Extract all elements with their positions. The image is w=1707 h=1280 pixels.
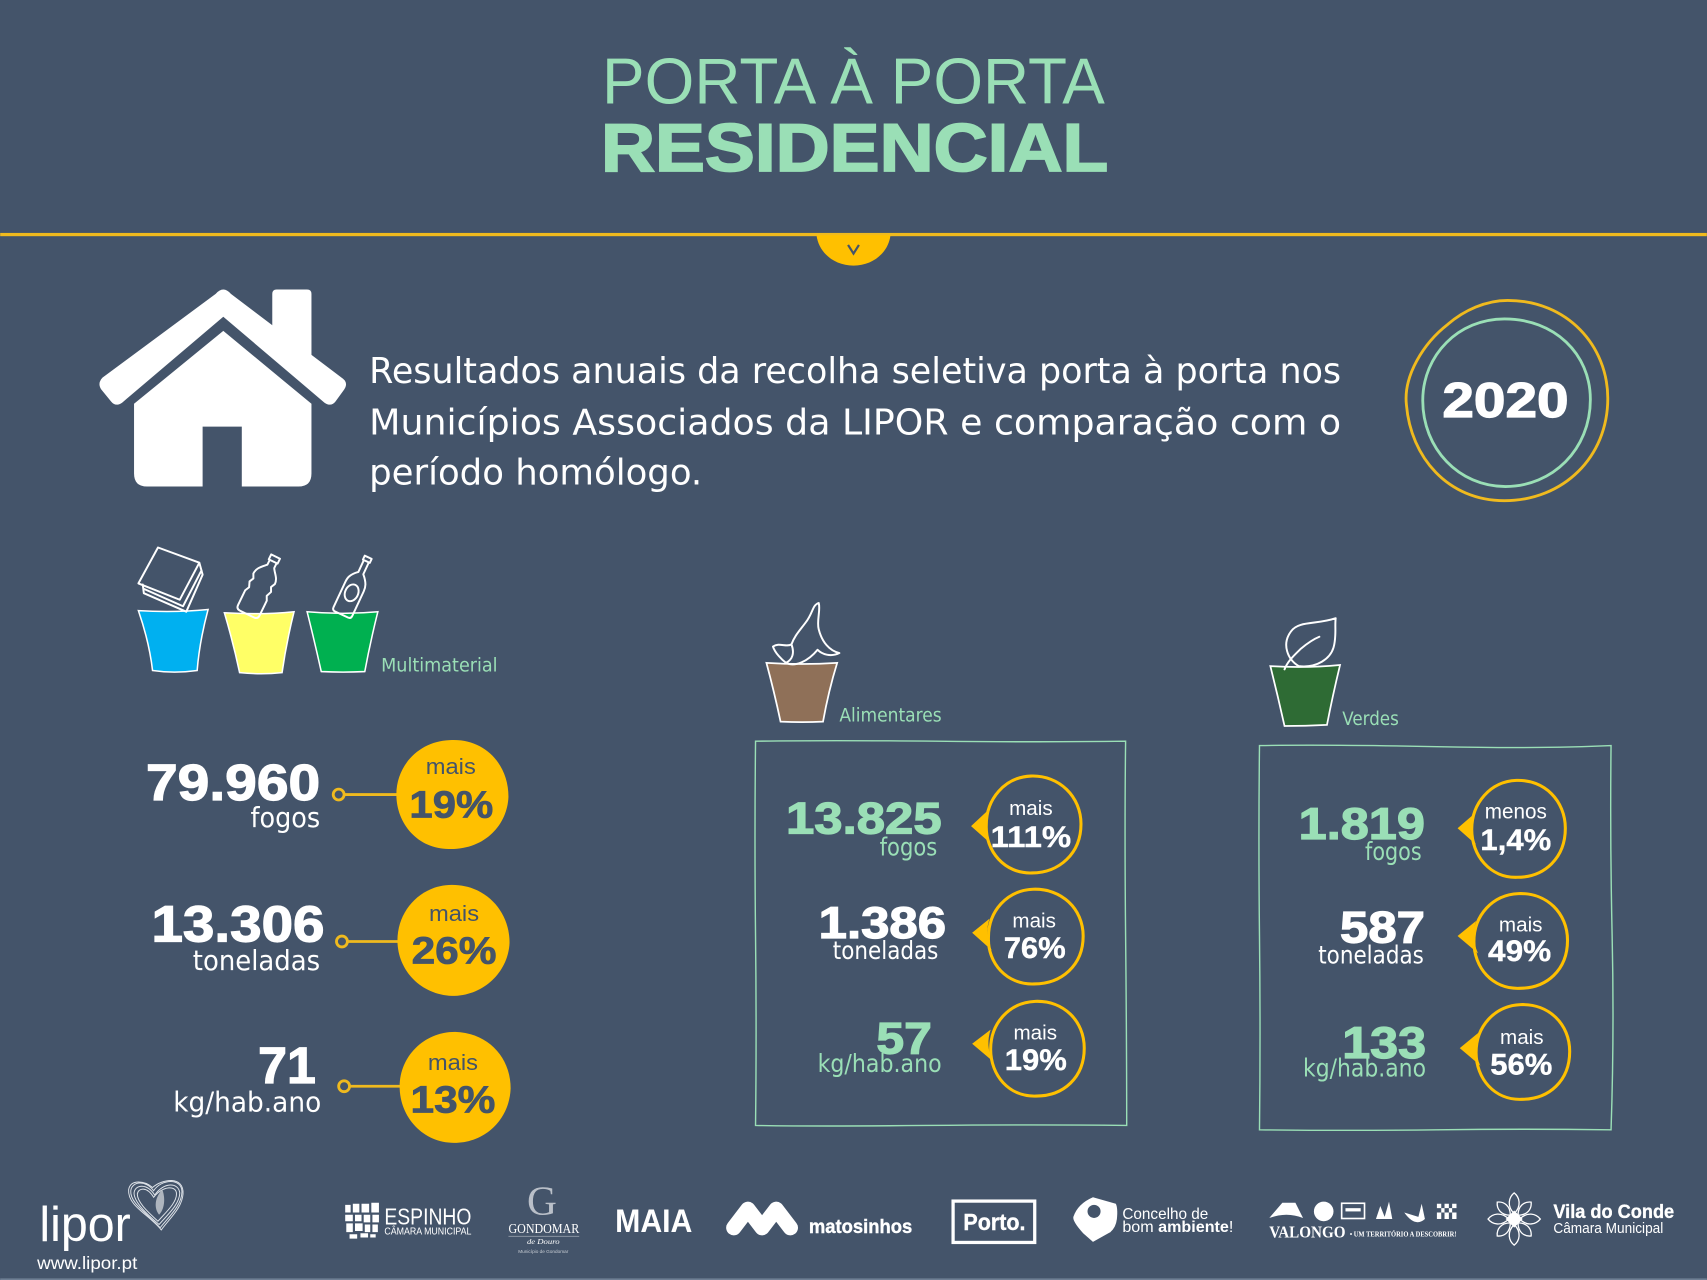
stat: 71 kg/hab.ano: kg/hab.ano (173, 1087, 321, 1118)
bubble: mais 56%: mais (1500, 1026, 1544, 1049)
logo: Espinho: ESPINHO (384, 1203, 471, 1229)
bubble: mais 111%: mais (1009, 797, 1053, 820)
bubble: mais 19%: mais (1014, 1021, 1057, 1044)
bubble: mais 49%: 49% (1488, 935, 1551, 968)
stat: 57 kg/hab.ano: kg/hab.ano (818, 1049, 942, 1078)
stat: 1.819 fogos: fogos (1365, 837, 1422, 866)
logo: Matosinhos (734, 1209, 912, 1238)
bubble: mais 76%: 76% (1004, 932, 1066, 965)
label: Verdes: Verdes (1342, 709, 1399, 730)
stat: 1.819 fogos: 1.819 (1299, 800, 1425, 849)
logo: lipor: lipor (39, 1198, 131, 1252)
label: Alimentares: Alimentares (839, 706, 942, 727)
logo: Valongo: • UM TERRITÓRIO A DESCOBRIR! (1350, 1228, 1456, 1238)
stat: 133 kg/hab.ano: kg/hab.ano (1303, 1053, 1426, 1082)
stat: 57 kg/hab.ano: 57 (876, 1015, 932, 1064)
year badge 2020: 2020 (1442, 374, 1569, 428)
stat: 13.825 fogos: fogos (880, 833, 937, 862)
logo: Póvoa de Varzim: Concelho de (1122, 1206, 1209, 1223)
divider with tab (0, 233, 1707, 266)
stat: 587 toneladas (1318, 904, 1425, 969)
icon: brown bin with banana peel (766, 603, 839, 722)
stat: 57 kg/hab.ano (818, 1015, 942, 1078)
logo: Porto: Porto. (963, 1209, 1025, 1235)
stat: 1.819 fogos (1299, 800, 1425, 866)
title: RESIDENCIAL (601, 111, 1108, 186)
logo: Valongo (1269, 1202, 1456, 1242)
stat: 13.306 toneladas: 13.306 (151, 895, 325, 952)
title (601, 44, 1108, 186)
logo: lipor: www.lipor.pt (36, 1253, 137, 1273)
badge: mais 26%: mais (429, 901, 479, 926)
frame: alimentares (755, 741, 1127, 1126)
bubble: menos 1,4% (1458, 780, 1565, 877)
stat: 71 kg/hab.ano (173, 1037, 321, 1118)
intro text: período homólogo. (369, 452, 702, 493)
logo: Gondomar: GONDOMAR (508, 1221, 580, 1237)
logo: Espinho (345, 1203, 472, 1239)
icon: green bin with glass bottle (307, 553, 378, 672)
bubble: menos 1,4%: 1,4% (1480, 824, 1551, 857)
icon: yellow bin with plastic bottle (224, 551, 294, 674)
logo: Valongo: VALONGO (1269, 1223, 1345, 1242)
badge: mais 19%: mais (426, 754, 476, 779)
badge: mais 13%: 13% (411, 1079, 495, 1121)
title: PORTA À PORTA (602, 44, 1105, 117)
stat: 13.306 toneladas (151, 895, 325, 977)
bubble: mais 56%: 56% (1490, 1048, 1552, 1081)
logo: Gondomar: Município de Gondomar (518, 1249, 569, 1255)
stat: 133 kg/hab.ano: 133 (1342, 1019, 1426, 1068)
footer logos (36, 1178, 1674, 1273)
logo: Vila do Conde: Câmara Municipal (1553, 1221, 1663, 1237)
logo: Gondomar (508, 1178, 580, 1255)
icon: house (99, 290, 346, 487)
panel: multimaterial (138, 547, 511, 1143)
stat: 1.386 toneladas (819, 899, 946, 965)
stat: 71 kg/hab.ano: 71 (258, 1037, 316, 1094)
panel: alimentares (755, 603, 1127, 1126)
stat: 587 toneladas: 587 (1340, 904, 1425, 953)
logo: Póvoa de Varzim: bom ambiente! (1122, 1219, 1233, 1236)
bubble: mais 19% (972, 1001, 1084, 1096)
badge: mais 13% (339, 1032, 511, 1143)
logo: Póvoa de Varzim (1073, 1197, 1233, 1242)
stat: 79.960 fogos: fogos (251, 803, 320, 834)
badge: mais 19% (333, 740, 508, 849)
bubble: mais 49%: mais (1499, 914, 1542, 937)
panel: verdes (1259, 618, 1613, 1130)
logo: Espinho: CÂMARA MUNICIPAL (384, 1226, 472, 1237)
bubble: mais 76% (972, 889, 1083, 984)
stat: 13.306 toneladas: toneladas (193, 946, 320, 977)
icon: blue bin with paper (138, 547, 208, 672)
bubble: menos 1,4%: menos (1485, 801, 1547, 824)
logo: Porto (953, 1201, 1035, 1242)
stat: 13.825 fogos: 13.825 (786, 795, 942, 844)
intro text: Municípios Associados da LIPOR e comparação com o (369, 402, 1341, 443)
logo: Vila do Conde: Vila do Conde (1553, 1202, 1674, 1223)
label: Multimaterial: Multimaterial (381, 656, 498, 677)
intro text: Resultados anuais da recolha seletiva porta à porta nos (369, 351, 1341, 392)
bubble: mais 19%: 19% (1005, 1044, 1067, 1077)
year badge 2020 (1406, 300, 1608, 501)
stat: 587 toneladas: toneladas (1318, 940, 1424, 969)
badge: mais 26%: 26% (412, 930, 496, 972)
logo: Maia: MAIA (615, 1202, 692, 1239)
bubble: mais 49% (1458, 894, 1568, 988)
stat: 79.960 fogos: 79.960 (146, 754, 320, 811)
badge: mais 26% (336, 885, 510, 996)
bubble: mais 111% (971, 776, 1081, 873)
logo: Gondomar: de Douro (527, 1237, 560, 1246)
bubble: mais 56% (1460, 1005, 1570, 1099)
badge: mais 19%: 19% (409, 784, 493, 826)
stat: 13.825 fogos (786, 795, 942, 862)
logo: Matosinhos: matosinhos (809, 1216, 912, 1238)
intro text (369, 351, 1341, 493)
stat: 79.960 fogos (146, 754, 320, 834)
stat: 1.386 toneladas: 1.386 (819, 899, 946, 948)
logo: Vila do Conde (1488, 1193, 1674, 1245)
stat: 133 kg/hab.ano (1303, 1019, 1426, 1082)
bubble: mais 76%: mais (1012, 909, 1056, 932)
bubble: mais 111%: 111% (991, 821, 1071, 854)
logo: lipor (36, 1181, 183, 1273)
frame: verdes (1259, 745, 1613, 1130)
logo: Gondomar: G (527, 1178, 557, 1224)
badge: mais 13%: mais (428, 1050, 478, 1075)
stat: 1.386 toneladas: toneladas (833, 936, 938, 965)
icon: green bin with leaf (1270, 618, 1340, 726)
